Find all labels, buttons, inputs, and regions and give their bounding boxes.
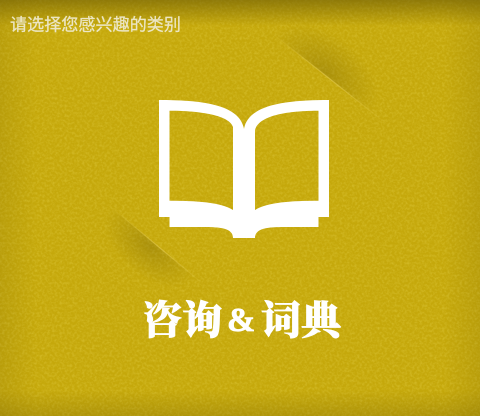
title: & <box>227 302 255 339</box>
crease: lower left <box>117 216 198 280</box>
crease: upper right <box>280 38 380 118</box>
title <box>142 289 348 346</box>
icon: open book <box>159 100 329 238</box>
title: 词典 <box>261 289 348 346</box>
title: 咨询 <box>142 289 222 346</box>
prompt text: 请选择您感兴趣的类别 <box>10 16 181 34</box>
